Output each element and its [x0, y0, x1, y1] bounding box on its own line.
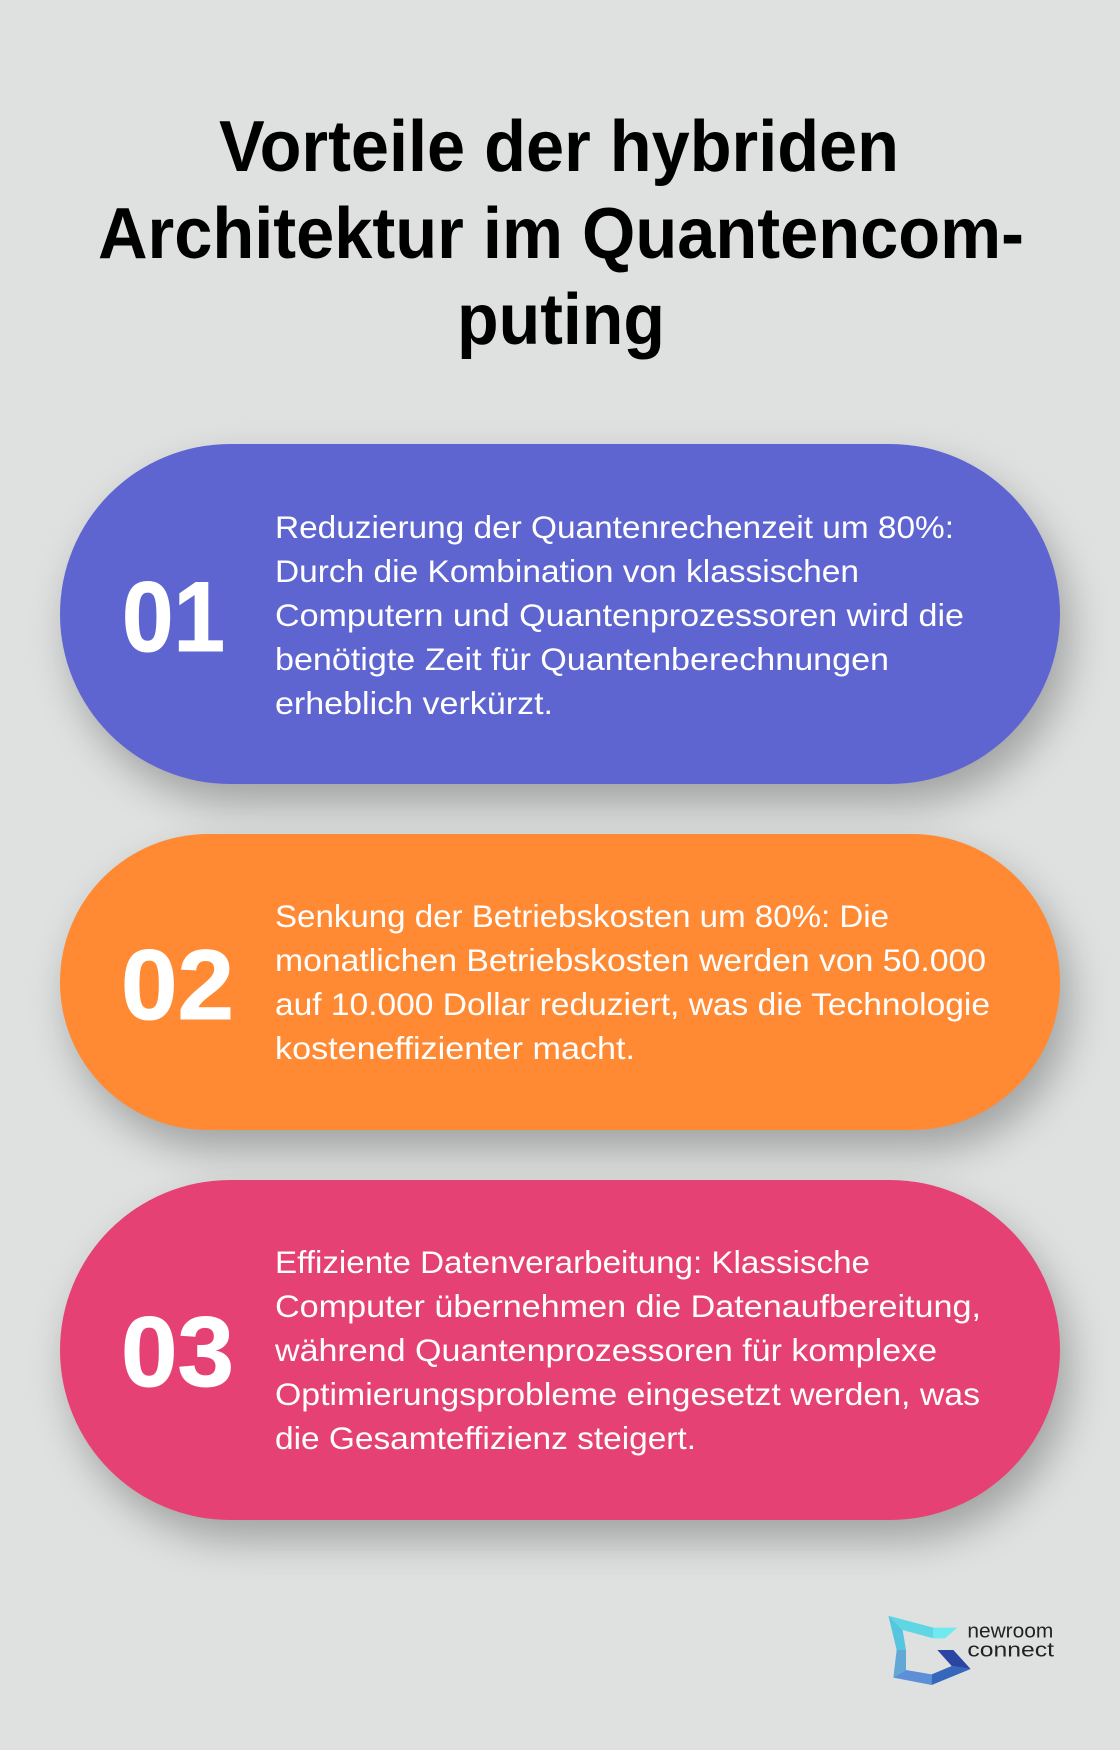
logo: newroom connect [888, 1616, 1055, 1685]
title: Architektur im Quantencom- [98, 194, 1024, 274]
panel: 03: Optimierungsprobleme eingesetzt werden, was [275, 1376, 980, 1412]
panel: 03: 03 [121, 1296, 234, 1407]
logo: newroom connect: connect [967, 1640, 1055, 1662]
panel: 03: Computer übernehmen die Datenaufbereitung, [275, 1288, 981, 1324]
panel: 02: 02 [121, 929, 234, 1040]
panel: 02: kosteneffizienter macht. [275, 1030, 635, 1066]
panel: 01: Reduzierung der Quantenrechenzeit um 80%: [275, 509, 954, 545]
panel: 02: monatlichen Betriebskosten werden von 50.000 [275, 942, 986, 978]
panel: 01: erheblich verkürzt. [275, 685, 553, 721]
title [98, 107, 1024, 360]
panel: 01: 01 [122, 561, 225, 672]
logo: newroom connect: newroom [967, 1621, 1053, 1643]
title: puting [457, 280, 665, 360]
panel: 01: Computern und Quantenprozessoren wird die [275, 597, 964, 633]
panel: 03: die Gesamteffizienz steigert. [275, 1420, 696, 1456]
panel: 03: Effiziente Datenverarbeitung: Klassische [275, 1244, 870, 1280]
panel: 03 [60, 1180, 1060, 1520]
panel: 02: Senkung der Betriebskosten um 80%: Die [275, 898, 889, 934]
panel: 03: während Quantenprozessoren für komplexe [274, 1332, 937, 1368]
panel: 01: Durch die Kombination von klassischen [275, 553, 859, 589]
panel: 01: benötigte Zeit für Quantenberechnungen [275, 641, 889, 677]
panel: 01 [60, 444, 1060, 784]
panel: 02 [60, 834, 1060, 1130]
panel: 02: auf 10.000 Dollar reduziert, was die Technologie [275, 986, 990, 1022]
title: Vorteile der hybriden [219, 107, 899, 187]
